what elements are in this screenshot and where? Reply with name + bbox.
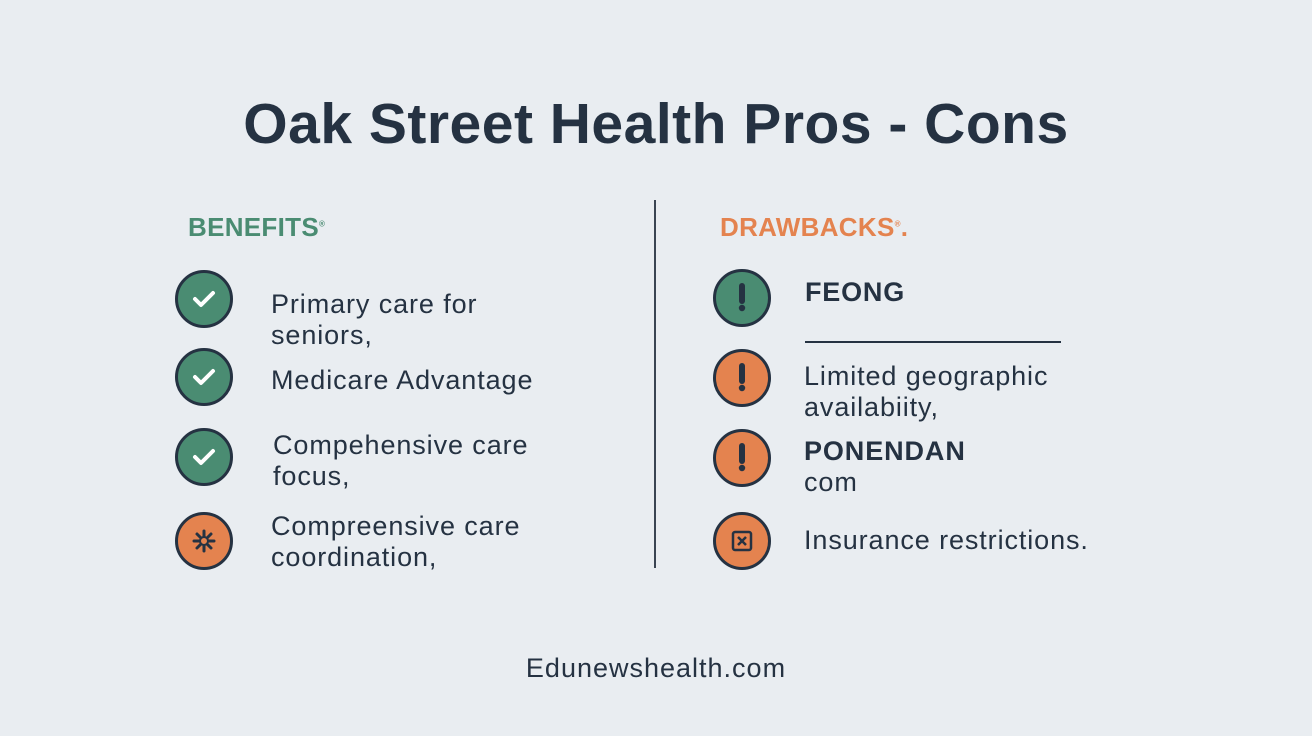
title: Oak Street Health Pros - Cons	[243, 92, 1069, 156]
heading: benefits: BENEFITS®	[188, 212, 325, 242]
text: drawback 2	[804, 361, 1048, 422]
text: benefit 3	[273, 430, 528, 491]
icon: exclamation green	[713, 269, 771, 327]
text: drawback 2: Limited geographic	[804, 361, 1048, 391]
icon: x box	[713, 512, 771, 570]
icon: asterisk	[175, 512, 233, 570]
text: drawback 1: FEONG	[805, 277, 905, 307]
text: benefit 3: Compehensive care	[273, 430, 528, 460]
text: benefit 4	[271, 511, 520, 572]
icon: exclamation 2	[713, 349, 771, 407]
icon: check 2	[175, 348, 233, 406]
text: drawback 3: com	[804, 467, 858, 497]
text: benefit 1: seniors,	[271, 320, 373, 350]
icon: check 1	[175, 270, 233, 328]
text: benefit 1	[271, 289, 477, 350]
text: benefit 4: coordination,	[271, 542, 437, 572]
text: drawback 3: PONENDAN	[804, 436, 966, 466]
text: drawback 3	[804, 436, 966, 497]
separator line	[805, 341, 1061, 343]
heading: drawbacks: DRAWBACKS®.	[720, 212, 908, 242]
icon: exclamation 3	[713, 429, 771, 487]
panel: benefits	[175, 212, 533, 572]
panel: drawbacks	[713, 212, 1089, 570]
divider	[654, 200, 656, 568]
text: benefit 1: Primary care for	[271, 289, 477, 319]
text: benefit 4: Compreensive care	[271, 511, 520, 541]
text: benefit 3: focus,	[273, 461, 350, 491]
text: drawback 4: Insurance restrictions.	[804, 525, 1089, 555]
icon: check 3	[175, 428, 233, 486]
footer: Edunewshealth.com	[526, 653, 786, 683]
text: benefit 2: Medicare Advantage	[271, 365, 533, 395]
text: drawback 2: availabiity,	[804, 392, 939, 422]
